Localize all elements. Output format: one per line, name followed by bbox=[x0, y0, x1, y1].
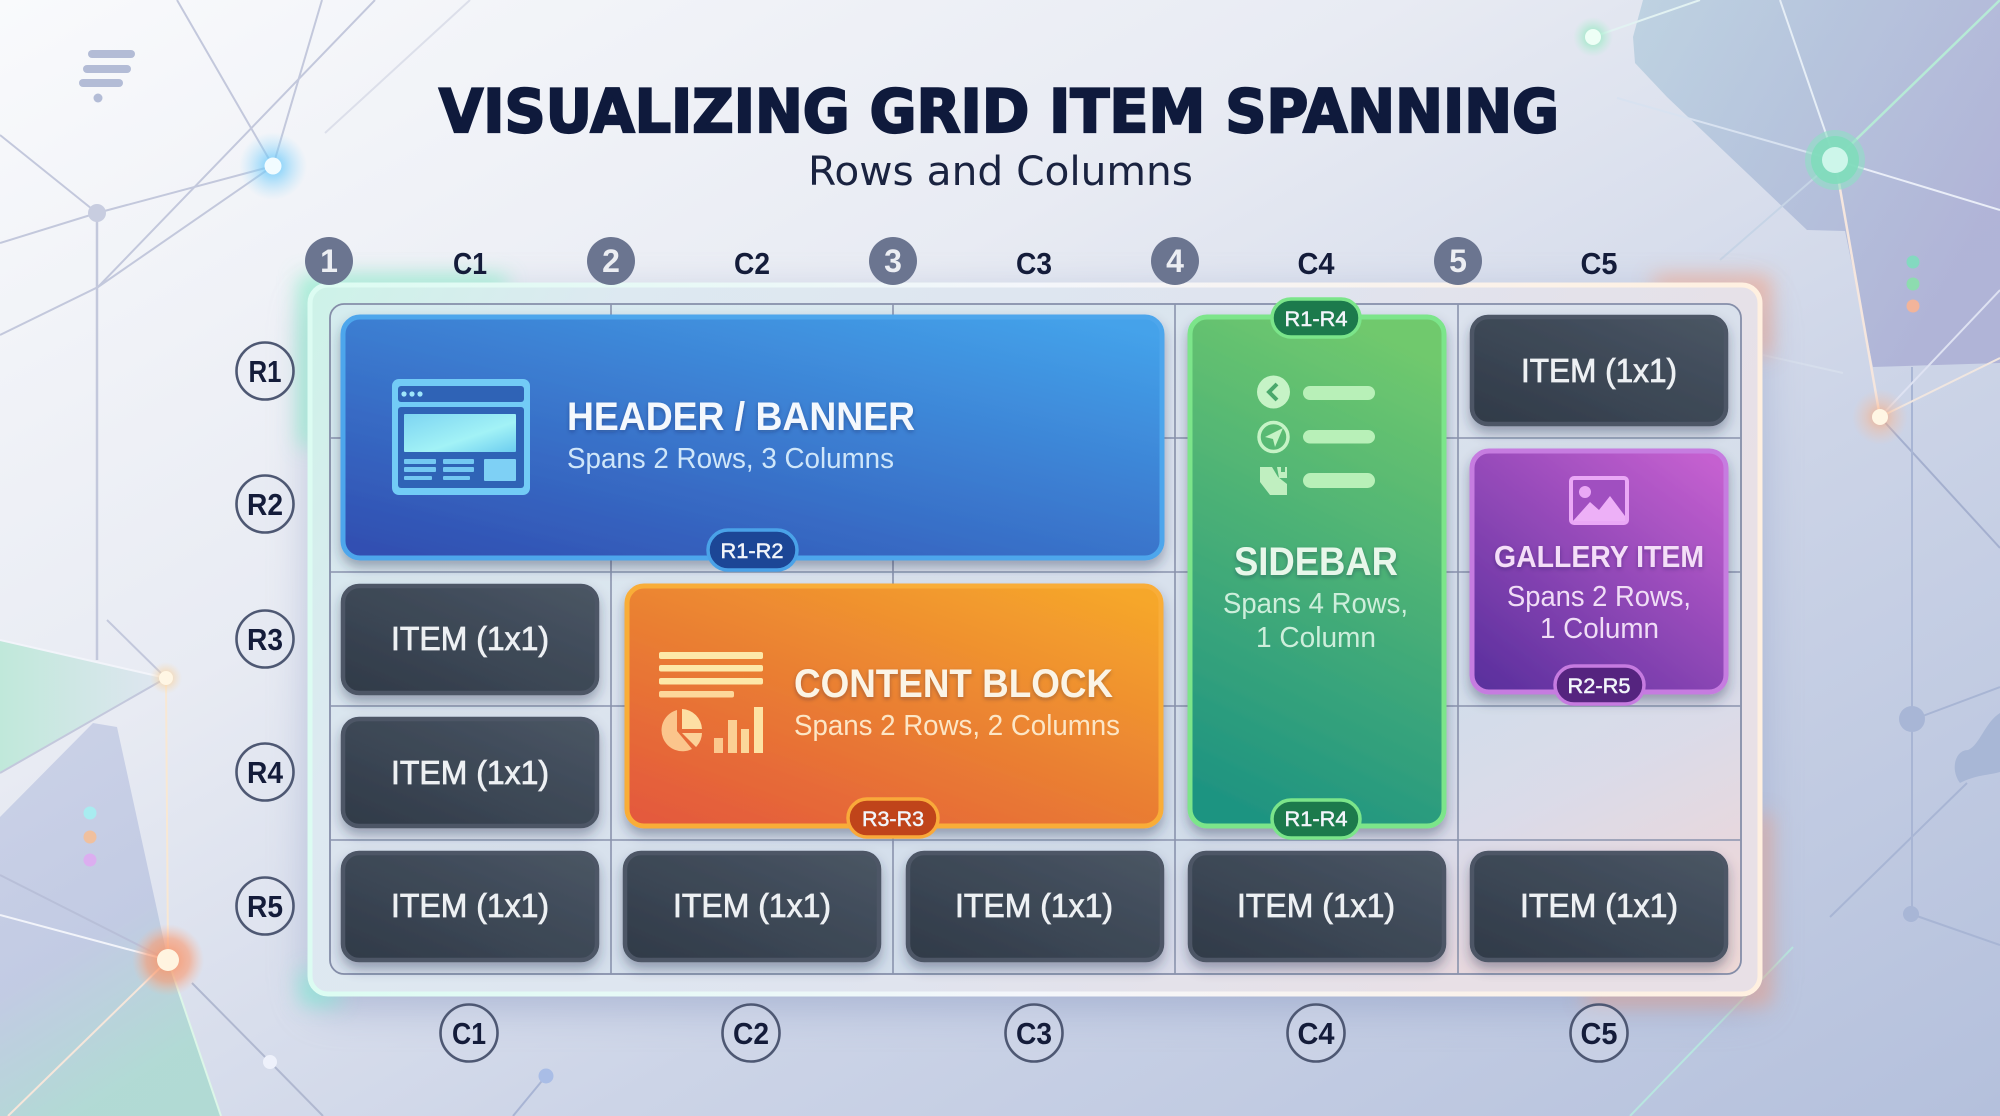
item: C4 R5: ITEM (1x1) bbox=[1237, 887, 1395, 924]
panel: header banner bbox=[343, 317, 1162, 570]
item: C1 R5: ITEM (1x1) bbox=[391, 887, 549, 924]
top column labels bbox=[453, 246, 1618, 281]
grid line number markers: 2 bbox=[602, 243, 620, 279]
row labels: R3 bbox=[247, 622, 283, 657]
badge: R2-R5 bbox=[1555, 666, 1644, 704]
badge: R1-R4 top bbox=[1272, 299, 1360, 337]
item: C2 R5: ITEM (1x1) bbox=[673, 887, 831, 924]
badge: R3-R3 bbox=[848, 799, 938, 837]
badge: R1-R4 top: R1-R4 bbox=[1284, 308, 1348, 331]
panel: content block bbox=[627, 586, 1161, 837]
grid line number markers: 1 bbox=[320, 243, 338, 279]
gallery description: 1 Column bbox=[1540, 613, 1659, 645]
icon: image bbox=[1571, 478, 1627, 523]
item: C1 R3 bbox=[343, 586, 597, 693]
icon: browser window bbox=[392, 379, 530, 495]
item: C5 R1: ITEM (1x1) bbox=[1521, 352, 1677, 389]
badge: R3-R3: R3-R3 bbox=[862, 808, 924, 831]
item: C1 R4: ITEM (1x1) bbox=[391, 754, 549, 791]
sidebar description: 1 Column bbox=[1256, 622, 1376, 654]
row labels: R1 bbox=[248, 354, 282, 389]
grid line number markers: 5 bbox=[1449, 243, 1467, 279]
icon: navigation list bbox=[1257, 376, 1375, 495]
badge: R1-R2 bbox=[708, 530, 797, 570]
grid cells background bbox=[330, 304, 1741, 974]
content description: Spans 2 Rows, 2 Columns bbox=[794, 710, 1120, 742]
header description: Spans 2 Rows, 3 Columns bbox=[567, 443, 894, 475]
top column labels: C1 bbox=[453, 246, 487, 281]
gallery description: Spans 2 Rows, bbox=[1507, 581, 1691, 613]
grid lines bbox=[330, 304, 1741, 974]
sidebar description: Spans 4 Rows, bbox=[1223, 588, 1408, 620]
badge: R1-R4 bottom: R1-R4 bbox=[1284, 808, 1348, 831]
item: C5 R5: ITEM (1x1) bbox=[1520, 887, 1678, 924]
bottom column labels: C4 bbox=[1298, 1016, 1335, 1051]
row labels: R2 bbox=[247, 487, 283, 522]
bottom column labels: C5 bbox=[1580, 1016, 1618, 1051]
top column labels: C4 bbox=[1298, 246, 1335, 281]
gallery description bbox=[1507, 581, 1691, 645]
sidebar title: SIDEBAR bbox=[1234, 540, 1398, 584]
item: C3 R5 bbox=[908, 853, 1162, 960]
item: C4 R5 bbox=[1190, 853, 1444, 960]
content title: CONTENT BLOCK bbox=[794, 662, 1113, 706]
top column labels: C2 bbox=[734, 246, 770, 281]
bottom column labels bbox=[440, 1004, 1628, 1062]
bottom column labels: C1 bbox=[452, 1016, 486, 1051]
bottom column labels: C3 bbox=[1016, 1016, 1052, 1051]
title: VISUALIZING GRID ITEM SPANNING bbox=[439, 77, 1559, 147]
panel: sidebar bbox=[1190, 299, 1444, 838]
header title: HEADER / BANNER bbox=[567, 395, 915, 439]
gallery title: GALLERY ITEM bbox=[1494, 539, 1704, 574]
top column labels: C3 bbox=[1016, 246, 1052, 281]
badge: R1-R4 bottom bbox=[1272, 800, 1360, 838]
top column labels: C5 bbox=[1580, 246, 1618, 281]
sidebar description bbox=[1223, 588, 1408, 654]
item: C1 R3: ITEM (1x1) bbox=[391, 620, 549, 657]
items: 1x1 cells bbox=[343, 317, 1726, 960]
grid line number markers: 4 bbox=[1166, 243, 1184, 279]
grid line number markers bbox=[305, 237, 1482, 285]
badge: R2-R5: R2-R5 bbox=[1568, 675, 1630, 698]
item: C1 R5 bbox=[343, 853, 597, 960]
item: C1 R4 bbox=[343, 719, 597, 826]
row labels: R4 bbox=[247, 755, 284, 790]
panel: grid container bbox=[308, 284, 1763, 1008]
panel: gallery item bbox=[1472, 451, 1726, 704]
bottom column labels: C2 bbox=[733, 1016, 769, 1051]
decorative dots right bbox=[1906, 256, 1920, 312]
icon: text and charts bbox=[659, 652, 763, 753]
grid line number markers: 3 bbox=[884, 243, 902, 279]
row labels bbox=[236, 342, 294, 934]
item: C5 R1 bbox=[1472, 317, 1726, 424]
decorative dots left bbox=[84, 806, 96, 866]
icon: top-left logo bbox=[79, 50, 135, 102]
item: C2 R5 bbox=[625, 853, 879, 960]
row labels: R5 bbox=[247, 889, 283, 924]
item: C3 R5: ITEM (1x1) bbox=[955, 887, 1113, 924]
item: C5 R5 bbox=[1472, 853, 1726, 960]
subtitle: Rows and Columns bbox=[808, 149, 1193, 195]
badge: R1-R2: R1-R2 bbox=[720, 540, 784, 563]
